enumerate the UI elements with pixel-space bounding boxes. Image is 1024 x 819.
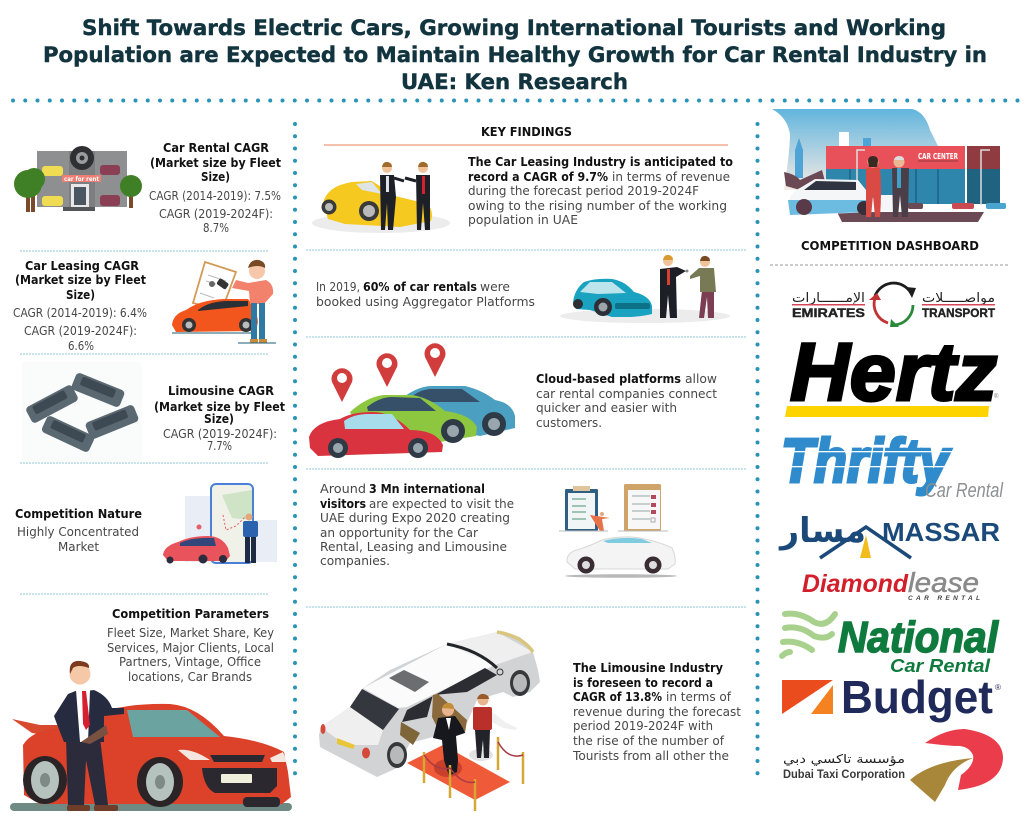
logo: Thrifty Car Rental: Car Rental [925,480,1003,502]
heading: car rental CAGR: (Market size by Fleet [150,156,281,170]
heading: car leasing CAGR [15,259,146,302]
logo: Dubai Taxi Corporation: مؤسسة تاكسي دبي [783,752,905,767]
text: limousine finding: period 2019-2024F with [573,719,713,733]
logo: Diamond Lease: CAR RENTAL [908,595,980,602]
text: limousine finding: the rise of the number of [573,734,725,748]
logo: Hertz: Hertz [790,327,997,418]
logo: Hertz: ® [994,393,999,400]
text: expo finding: are expected to visit the [369,497,514,511]
heading: limousine CAGR: (Market size by Fleet [154,400,285,414]
text: limousine finding: CAGR of 13.8% [573,690,662,704]
panel: competition nature [15,484,277,564]
text: expo finding: UAE during Expo 2020 creating [320,511,510,525]
logo: Massar [778,511,1000,558]
heading: car leasing CAGR: Car Leasing CAGR [25,259,139,273]
logo: Diamond Lease: lease [908,567,979,598]
finding: car leasing CAGR [312,155,733,233]
text: cloud-based finding: customers. [536,416,602,430]
heading: car rental CAGR [150,141,281,184]
text: car leasing values [13,306,147,353]
icon: blue car and key handover [560,255,730,323]
logo: Massar: MASSAR [882,517,1000,547]
text: cloud-based finding: Cloud-based platforms [536,372,681,386]
icon: three cars with location pins [309,343,515,458]
text: car leasing finding: in terms of revenue [612,170,730,184]
title: UAE: Ken Research [401,70,628,95]
heading: car leasing CAGR: Size) [66,288,95,302]
logo: Diamond Lease [802,567,980,602]
text: cloud-based finding: car rental companies connect [536,387,717,401]
heading: competition nature: Competition Nature [15,507,142,521]
icon: car rental building: car for rent [64,175,99,183]
logo: Budget: ® [995,683,1001,692]
text: car leasing values: 6.6% [68,339,94,353]
text: aggregator finding: were [480,280,510,294]
icon: car center dealership [772,109,1006,222]
title: Shift Towards Electric Cars, Growing International Tourists and Working [82,16,946,41]
icon: clipboards and white car [559,484,677,578]
text: competition nature value [17,525,139,554]
text: cloud-based finding: allow [685,372,717,386]
logo: Budget: Budget [841,671,993,723]
text: car rental values [149,189,281,235]
logo: Emirates Transport: EMIRATES [792,306,865,320]
text: car leasing finding: The Car Leasing Industry is anticipated to [468,155,733,169]
logo: Thrifty Car Rental: Thrifty [781,427,952,496]
text: expo finding: 3 Mn international [369,482,485,496]
logo: National Car Rental [782,613,999,676]
icon: two businessmen with yellow convertible [312,162,450,233]
heading: car rental CAGR: Size) [201,170,230,184]
text: car leasing finding: during the forecast period 2019-2024F [468,184,699,198]
text: limousine values: CAGR (2019-2024F): [163,427,277,441]
text: competition parameters list: Partners, Vintage, Office [119,655,261,669]
text: car rental values: CAGR (2014-2019): 7.5% [149,189,281,203]
title: Population are Expected to Maintain Healthy Growth for Car Rental Industry in [43,43,987,68]
text: aggregator finding: booked using Aggregator Platforms [316,295,535,309]
finding: aggregator platforms [316,255,730,323]
text: car rental values: 8.7% [203,221,229,235]
text: aggregator finding: In 2019, [316,280,360,294]
heading: car rental CAGR: Car Rental CAGR [163,141,269,155]
logo: National Car Rental: Car Rental [890,656,991,676]
finding: cloud-based platforms [309,343,717,458]
panel: competition dashboard [772,109,1006,802]
text: car rental values: CAGR (2019-2024F): [159,207,273,221]
text: expo finding [320,482,514,568]
icon: car leasing agent with orange car [172,260,276,343]
icon: four isometric limousines [22,362,142,462]
text: limousine finding: is foreseen to record a [573,676,713,690]
text: competition parameters list: locations, Car Brands [128,670,252,684]
heading: car leasing CAGR: (Market size by Fleet [15,273,146,287]
logo: National Car Rental: National [838,613,999,662]
text: expo finding: visitors [320,497,366,511]
logo: Emirates Transport [792,283,996,327]
finding: limousine industry [319,632,741,811]
text: car leasing finding: population in UAE [468,213,578,227]
text: competition parameters list: Fleet Size, Market Share, Key [107,626,274,640]
logo: Massar: مسار [778,511,866,551]
text: expo finding: Around [320,482,366,496]
heading: key findings: KEY FINDINGS [481,125,572,139]
panel: limousine CAGR [22,362,285,462]
text: car leasing finding [468,155,733,227]
text: competition parameters list: Services, Major Clients, Local [107,641,274,655]
heading: competition dashboard: COMPETITION DASHBOARD [801,239,979,253]
text: cloud-based finding [536,372,717,430]
heading: limousine CAGR: Limousine CAGR [168,384,274,398]
panel: competition parameters [10,607,292,811]
panel: car rental CAGR [14,141,281,235]
text: aggregator finding [316,280,535,309]
text: limousine finding: revenue during the forecast [573,705,741,719]
logo: Emirates Transport: مواصـــــلات [922,291,995,306]
text: car leasing values: CAGR (2014-2019): 6.4% [13,306,147,320]
text: competition nature value: Market [58,540,99,554]
text: expo finding: Rental, Leasing and Limousine [320,540,507,554]
icon: businessman with red sports car [10,661,292,811]
text: cloud-based finding: quicker and easier with [536,401,677,415]
text: limousine finding: in terms of [666,690,732,704]
icon: car rental building [14,146,142,212]
panel: key findings [309,125,741,811]
logo: Dubai Taxi Corporation: Dubai Taxi Corporation [783,769,905,781]
text: limousine values: 7.7% [207,439,232,453]
logo: Dubai Taxi Corporation [783,729,1003,802]
logo: Emirates Transport: TRANSPORT [922,306,996,320]
icon: white limousine on red carpet [319,632,540,811]
icon: navigation app with car and person [163,484,277,564]
logo: Diamond Lease: Diamond [802,570,909,598]
text: limousine values [163,427,277,453]
text: expo finding: an opportunity for the Car [320,526,478,540]
text: aggregator finding: 60% of car rentals [363,280,477,294]
finding: expo 2020 visitors [320,482,677,578]
text: limousine finding: Tourists from all other the [572,749,729,763]
text: limousine finding [572,661,741,763]
text: competition nature value: Highly Concentrated [17,525,139,539]
text: expo finding: companies. [320,554,390,568]
icon: car center dealership: CAR CENTER [918,152,958,161]
text: car leasing finding: owing to the rising number of the working [468,199,727,213]
text: competition parameters list [107,626,274,684]
heading: competition parameters: Competition Parameters [112,607,269,621]
heading: limousine CAGR: Size) [204,412,234,426]
text: car leasing values: CAGR (2019-2024F): [24,324,137,338]
text: car leasing finding: record a CAGR of 9.7% [468,170,608,184]
title [43,16,987,95]
text: limousine finding: The Limousine Industry [573,661,723,675]
logo: Emirates Transport: الإمــــــارات [792,291,865,306]
heading: limousine CAGR [154,384,285,426]
panel: car leasing CAGR [13,259,276,353]
